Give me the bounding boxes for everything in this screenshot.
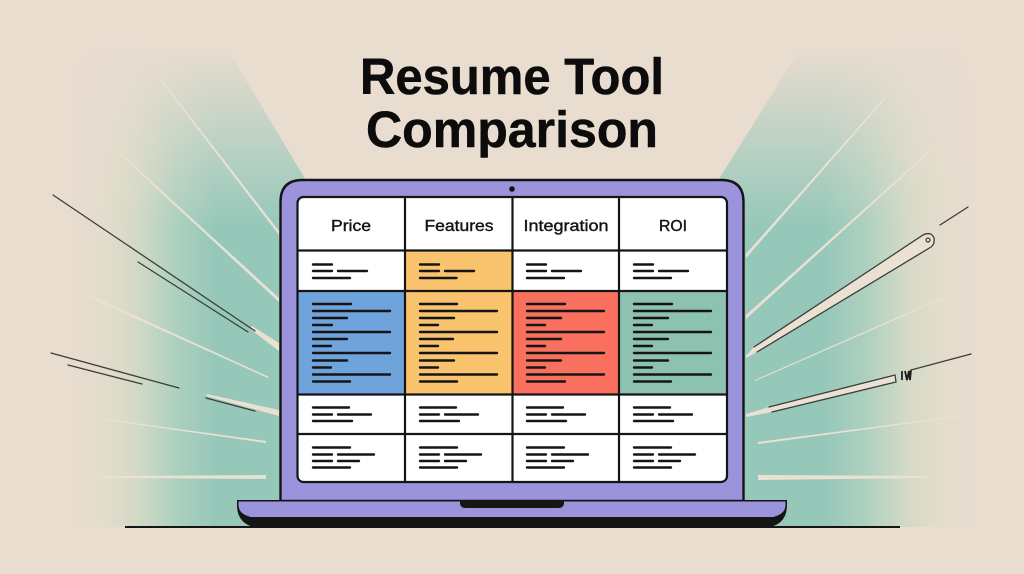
needle ray lower right bbox=[746, 207, 971, 417]
needle ray upper right bbox=[746, 234, 934, 358]
laptop lid bbox=[280, 180, 744, 501]
laptop base bbox=[237, 500, 787, 528]
left dark motion lines bbox=[51, 195, 255, 411]
right teal burst bbox=[719, 63, 938, 527]
row 4 text lines bbox=[313, 448, 695, 468]
cell: features row 1 orange bbox=[405, 251, 512, 291]
camera bbox=[509, 186, 515, 192]
ground line bbox=[125, 526, 900, 528]
left teal burst bbox=[108, 63, 305, 527]
base top surface bbox=[238, 502, 786, 517]
table grid bbox=[298, 197, 727, 482]
title bbox=[360, 48, 664, 158]
right speed rays bbox=[746, 97, 965, 480]
highlighted row text lines bbox=[313, 304, 390, 382]
table background bbox=[298, 197, 727, 482]
header: Price: Price bbox=[331, 218, 371, 235]
header: Features: Features bbox=[424, 218, 494, 235]
notch bbox=[460, 501, 564, 508]
header: Integration: Integration bbox=[524, 218, 608, 235]
cell: integration red bbox=[512, 291, 619, 394]
row 3 text lines bbox=[313, 408, 692, 421]
cell: price blue bbox=[298, 291, 405, 394]
cell: roi teal bbox=[619, 291, 727, 394]
title: Comparison bbox=[366, 101, 658, 158]
header: ROI: ROI bbox=[659, 218, 687, 235]
title: Resume Tool bbox=[360, 48, 664, 105]
left speed rays bbox=[90, 79, 279, 479]
laptop bbox=[237, 180, 787, 528]
row 1 text lines bbox=[313, 264, 688, 278]
cell: features orange bbox=[405, 291, 512, 394]
screen comparison table bbox=[298, 197, 727, 482]
